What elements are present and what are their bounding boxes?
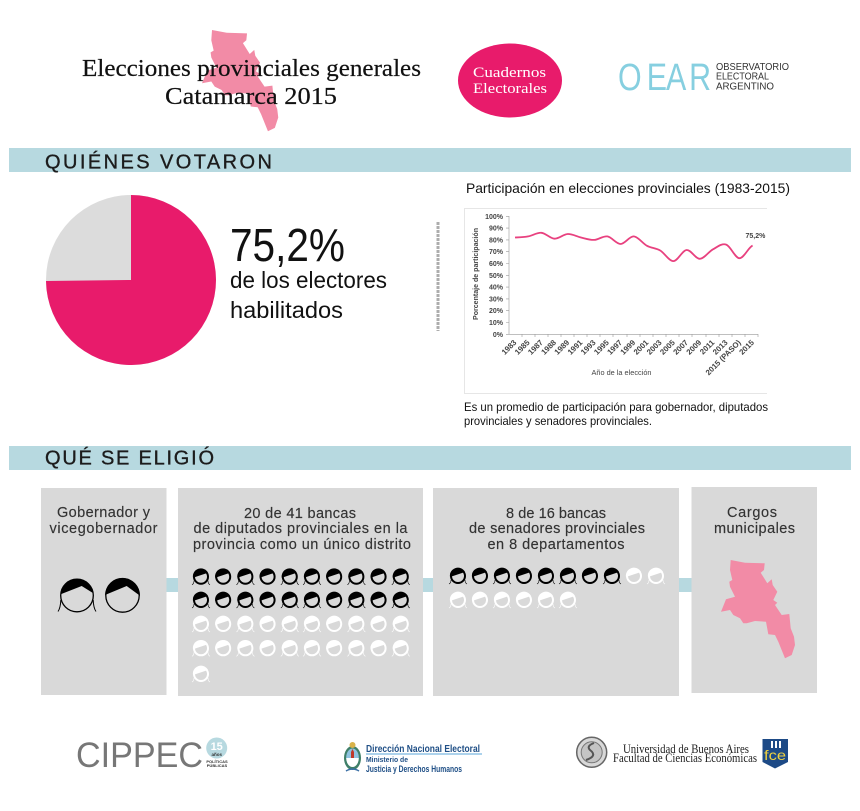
line chart: participation by year: 75,2%: [746, 233, 766, 240]
badge: Cuadernos Electorales: [458, 44, 562, 118]
panel: senadores: 8 de 16 bancas: [506, 506, 606, 522]
line chart: participation by year: 1985: [513, 338, 532, 357]
logo: OEAR: OBSERVATORIO: [716, 61, 789, 73]
line chart: participation by year: 30%: [489, 296, 504, 303]
line chart: participation by year: 20%: [489, 308, 504, 315]
logo: OEAR: OEAR: [618, 57, 711, 99]
logo: Universidad de Buenos Aires FCE: [577, 737, 788, 768]
line chart: participation by year: 2001: [632, 338, 651, 357]
panel: diputados: [178, 488, 423, 696]
title: Catamarca 2015: [165, 84, 337, 110]
map: Catamarca: [721, 560, 795, 658]
line chart: participation by year: 2015: [737, 338, 756, 357]
line chart: participation by year: 40%: [489, 285, 504, 292]
chart title: Participación en elecciones provinciales (1983-2015): [466, 180, 790, 196]
logo: OEAR: ELECTORAL: [716, 70, 769, 82]
icon: Argentine coat of arms: [344, 742, 361, 771]
logo: CIPPEC: años: [211, 752, 222, 757]
icon: FCE shield: fce: [764, 747, 786, 763]
big number: 75,2% de los electores habilitados: [230, 219, 387, 323]
icon: vicegobernador face: [105, 578, 140, 612]
logo: Dirección Nacional Electoral: Justicia y Derechos Humanos: [366, 764, 462, 775]
line chart: participation by year: 1983: [500, 338, 519, 357]
logo: Universidad de Buenos Aires FCE: Facultad de Ciencias Económicas: [613, 751, 757, 765]
panel: senadores: de senadores provinciales: [469, 521, 645, 537]
map: Catamarca header silhouette: [202, 30, 278, 131]
logo: OEAR: ARGENTINO: [716, 80, 774, 92]
line chart: participation by year: 2013: [711, 338, 730, 357]
panel: cargos municipales: [692, 487, 817, 693]
big number: 75,2% de los electores habilitados: 75,2%: [230, 219, 345, 271]
logo: CIPPEC: CIPPEC: [76, 736, 203, 775]
logo: Dirección Nacional Electoral: Dirección Nacional Electoral: [366, 744, 480, 755]
line chart: participation by year: 90%: [489, 226, 504, 233]
line chart: participation by year: 1988: [539, 338, 558, 357]
panel: cargos municipales: Cargos: [727, 505, 777, 521]
icon: gobernadora face: [58, 579, 96, 612]
line chart: participation by year: Año de la elección: [592, 370, 652, 377]
badge: Cuadernos Electorales: Cuadernos: [473, 65, 546, 81]
section heading: Qué se eligió: QUÉ SE ELIGIÓ: [45, 446, 214, 470]
line chart: participation by year: 10%: [489, 320, 504, 327]
icons: diputados, 20 of 41 seats in black: [192, 568, 410, 682]
icon: UBA seal: [577, 737, 607, 767]
section heading: Quiénes votaron: QUIÉNES VOTARON: [45, 150, 272, 174]
line chart: participation by year: 100%: [485, 214, 504, 221]
big number: 75,2% de los electores habilitados: habilitados: [230, 297, 343, 323]
line chart: participation by year: 1993: [579, 338, 598, 357]
line chart: participation by year: 2009: [685, 338, 704, 357]
chart note: [464, 400, 768, 428]
logo: CIPPEC: 15: [211, 741, 223, 753]
line chart: participation by year: 70%: [489, 249, 504, 256]
panel: diputados: provincia como un único distrito: [193, 537, 411, 553]
line chart: participation by year: 1997: [605, 338, 624, 357]
section heading: Qué se eligió: [9, 446, 851, 470]
chart note: provinciales y senadores provinciales.: [464, 414, 652, 428]
panel: senadores: [433, 488, 679, 696]
line chart: participation by year: 1991: [566, 338, 585, 357]
badge: Cuadernos Electorales: Electorales: [473, 81, 547, 97]
line chart: participation by year: 60%: [489, 261, 504, 268]
line chart: participation by year: 50%: [489, 273, 504, 280]
title: [82, 56, 421, 110]
panel: senadores: en 8 departamentos: [488, 537, 624, 553]
title: Elecciones provinciales generales: [82, 56, 421, 82]
logo: Dirección Nacional Electoral: [344, 742, 482, 775]
line chart: participation by year: Porcentaje de participación: [473, 228, 480, 320]
line chart: participation by year: 0%: [493, 332, 504, 339]
logo: CIPPEC: POLÍTICAS: [206, 759, 228, 764]
line chart: participation by year: 1999: [619, 338, 638, 357]
panel: diputados: 20 de 41 bancas: [244, 506, 356, 522]
line chart: participation by year: [464, 208, 767, 394]
line chart: participation by year: 2005: [658, 338, 677, 357]
section heading: Quiénes votaron: [9, 148, 851, 174]
line chart: participation by year: 1987: [526, 338, 545, 357]
panel: cargos municipales: municipales: [714, 521, 795, 537]
panel: gobernador: Gobernador y: [57, 505, 151, 521]
icons: senadores, 8 of 16 seats in black: [449, 568, 665, 608]
line chart: participation by year: 1995: [592, 338, 611, 357]
line chart: participation by year: 1989: [553, 338, 572, 357]
panel: gobernador: [41, 488, 166, 695]
big number: 75,2% de los electores habilitados: de los electores: [230, 267, 387, 293]
line chart: participation by year: 2015 (PASO): [704, 338, 743, 377]
panel: diputados: de diputados provinciales en la: [194, 521, 408, 537]
logo: CIPPEC: PÚBLICAS: [207, 763, 228, 768]
line chart: participation by year: 2011: [698, 338, 717, 356]
logo: Dirección Nacional Electoral: Ministerio de: [366, 755, 408, 764]
logo: OEAR: [618, 57, 789, 99]
pie chart: 75,2% participation: [46, 195, 216, 365]
line chart: participation by year: 80%: [489, 237, 504, 244]
line chart: participation by year: 2007: [671, 338, 690, 357]
panel: gobernador: vicegobernador: [50, 521, 158, 537]
logo: Universidad de Buenos Aires FCE: Universidad de Buenos Aires: [623, 742, 749, 756]
icon: FCE shield: [762, 739, 788, 768]
line chart: participation by year: 2003: [645, 338, 664, 357]
chart note: Es un promedio de participación para gobernador, diputados: [464, 400, 768, 414]
